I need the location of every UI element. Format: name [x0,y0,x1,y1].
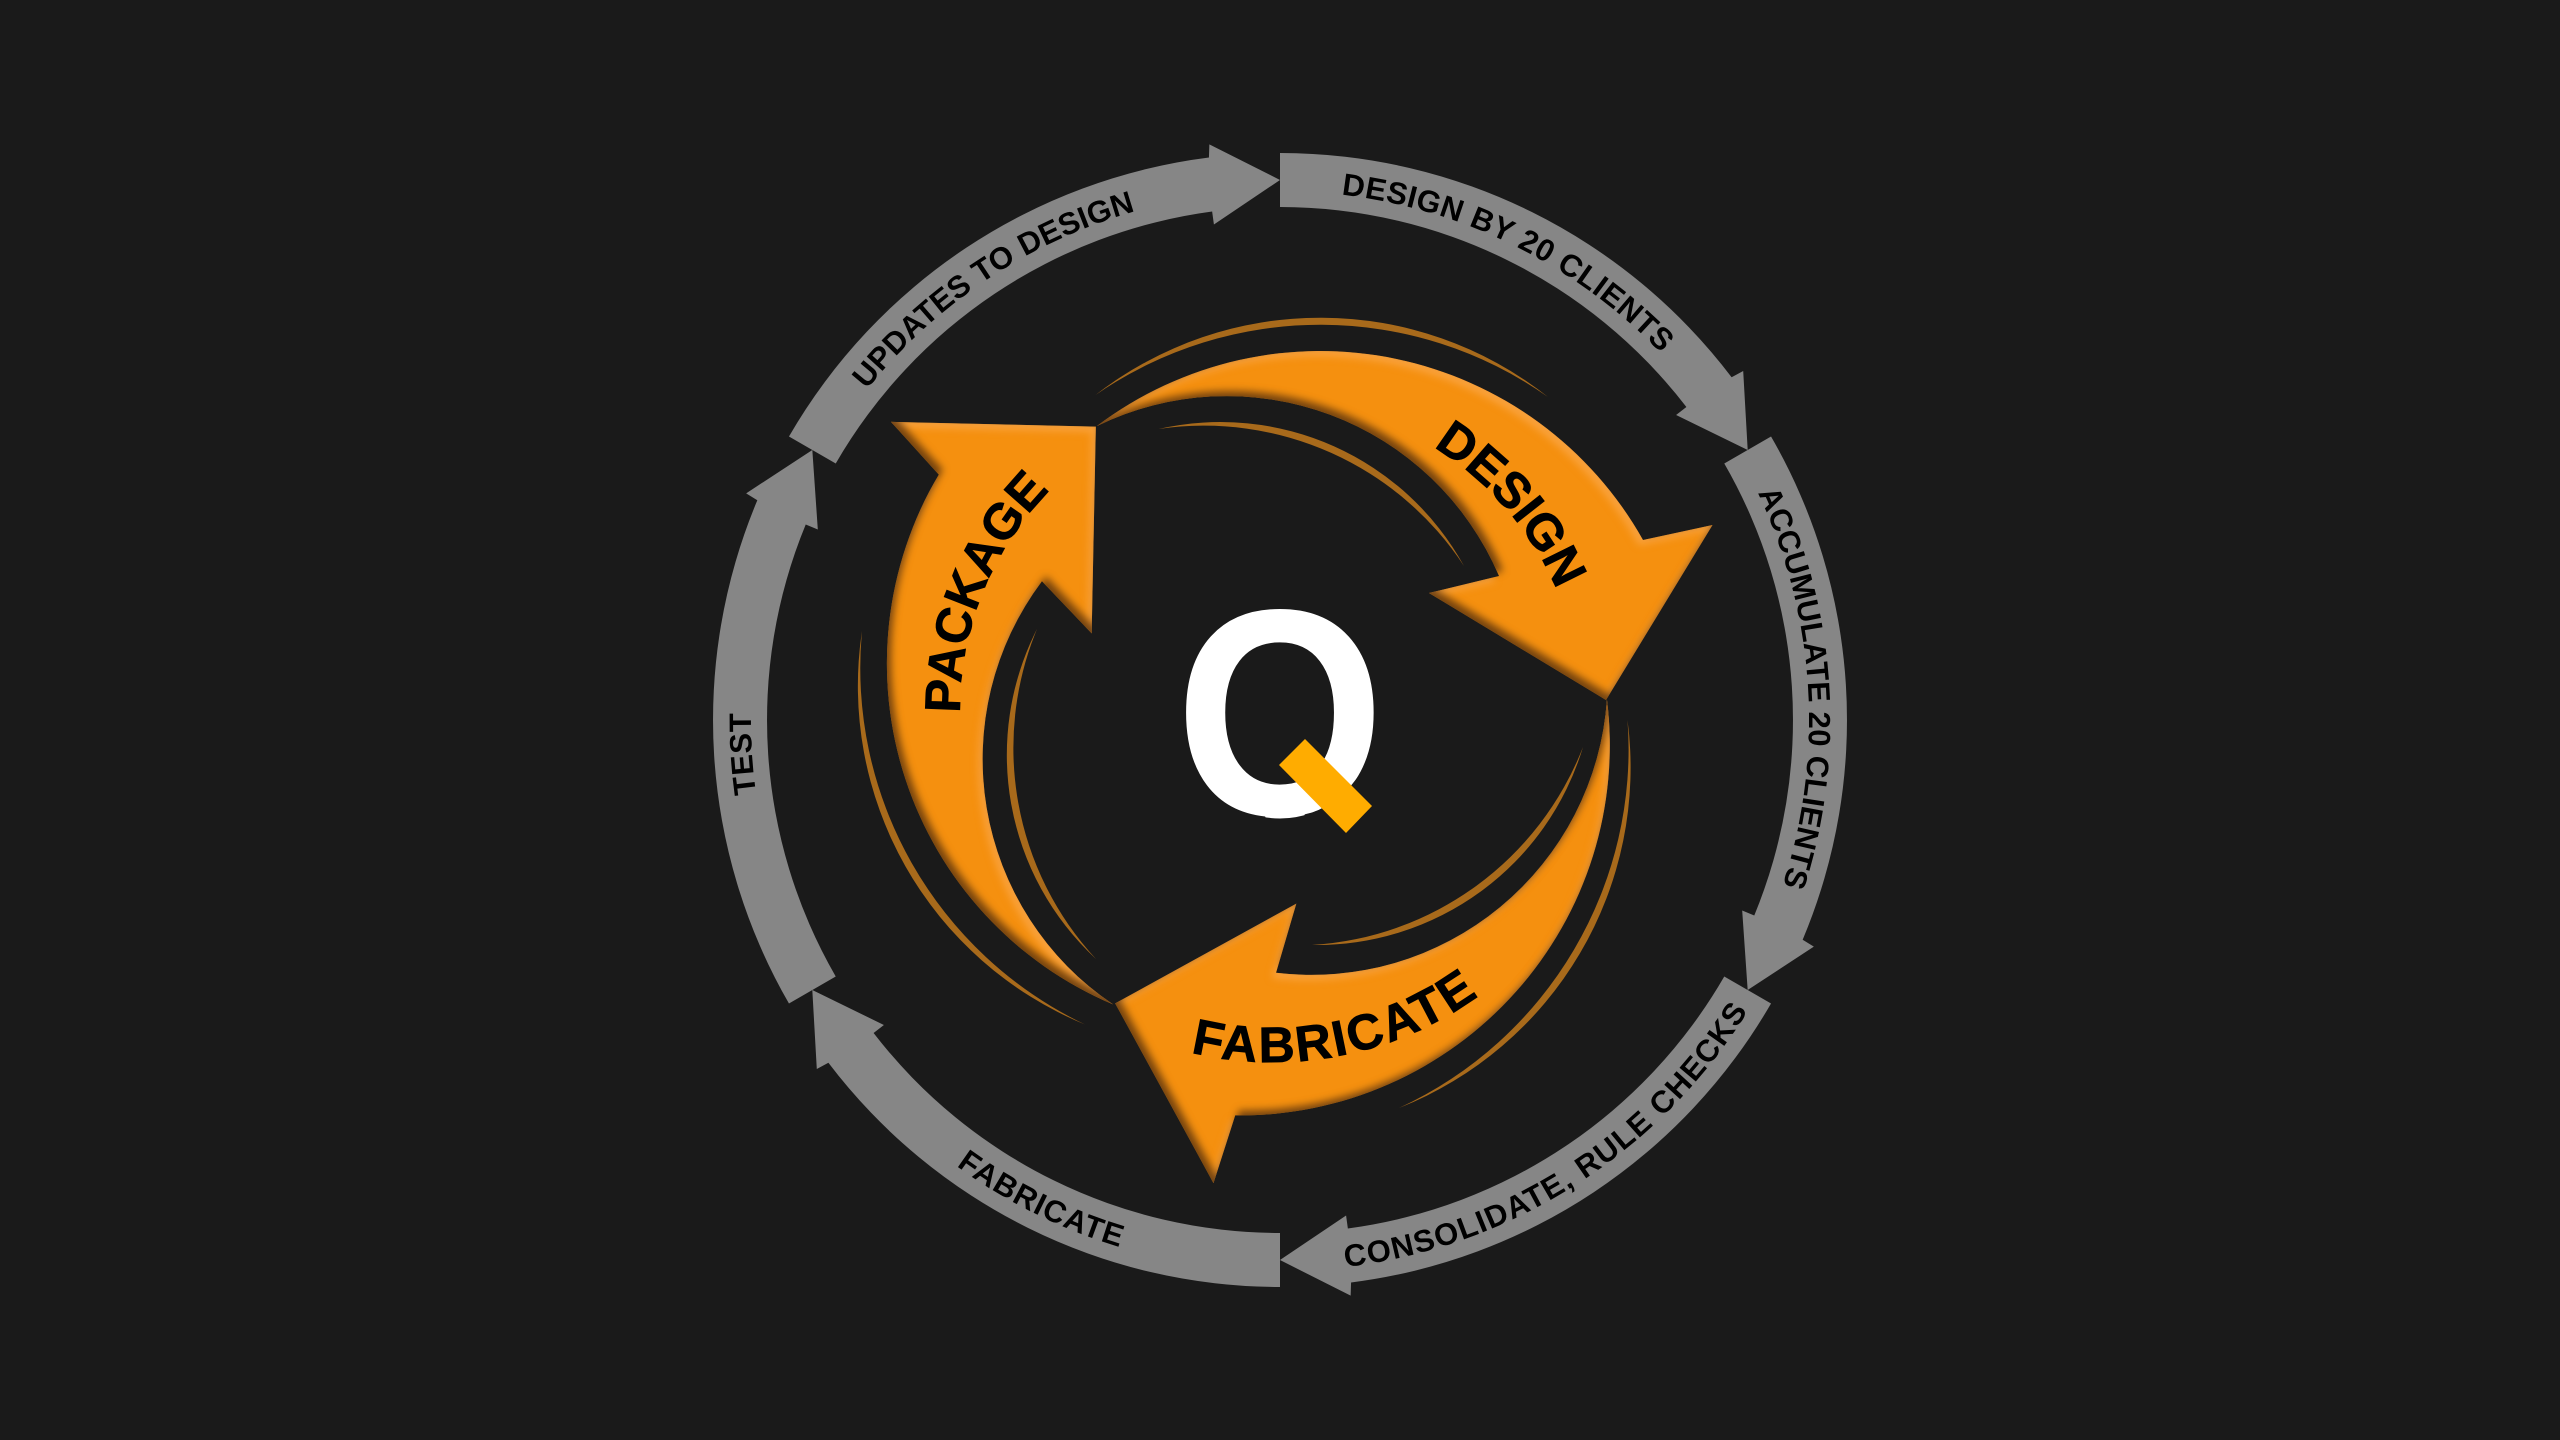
arrow: test [713,450,836,1004]
arrow: accumulate 20 clients: ACCUMULATE 20 CLIENTS [1758,492,1830,888]
crescents: fabricate [1312,720,1631,1108]
arrow: design by 20 clients [1280,153,1748,450]
orange arrow: design [1097,351,1712,700]
arrow: updates to design: UPDATES TO DESIGN [852,191,1134,386]
motion crescents [858,318,1631,1108]
label: package: PACKAGE [924,468,1049,710]
arrow: design by 20 clients: DESIGN BY 20 CLIENTS [1343,174,1673,350]
central Q logo [1186,609,1374,833]
crescents: design [1096,318,1548,566]
outer process ring [713,144,1847,1296]
arrow: fabricate: FABRICATE [958,1150,1124,1247]
arrow: accumulate 20 clients [1724,436,1847,990]
arrow: fabricate [812,990,1280,1287]
Q tail bar [1279,739,1372,833]
orange arrow: package [740,334,1350,1042]
letter Q: Q [1175,548,1385,878]
arrow: consolidate, rule checks: CONSOLIDATE, RULE CHECKS [1344,1003,1745,1266]
label: fabricate: FABRICATE [1193,968,1478,1063]
orange arrow: fabricate [1062,563,1672,1270]
arrow: updates to design [789,144,1280,464]
arrow: test: TEST [730,714,756,796]
crescents: package [858,629,1096,1024]
label: design: DESIGN [1436,420,1587,588]
